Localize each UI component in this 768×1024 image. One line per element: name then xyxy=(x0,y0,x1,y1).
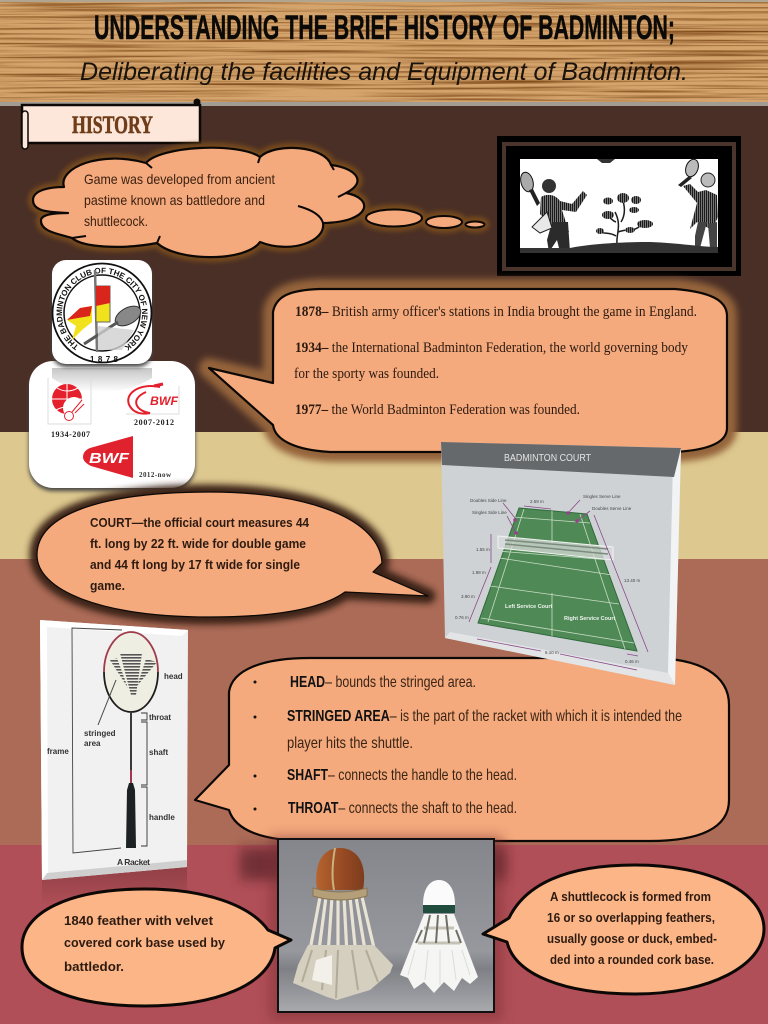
diagram: racket parts: area xyxy=(84,739,101,748)
diagram: racket parts: stringed xyxy=(84,729,116,738)
court labels: Left Service Court xyxy=(505,604,553,610)
court labels: Doubles Side Line xyxy=(470,498,507,503)
text: court dimensions: ft. long by 22 ft. wide for double game xyxy=(90,537,306,551)
text: modern shuttlecock xyxy=(547,890,717,967)
diagram: racket parts: handle xyxy=(149,813,175,822)
photo: old and modern shuttlecocks xyxy=(270,836,502,1020)
speech bubble: 1840 feather shuttlecock xyxy=(22,889,291,1006)
icon: small tree xyxy=(596,193,653,243)
text: timeline: 1934– the International Badminton Federation, the world governing body xyxy=(295,340,688,356)
diagram: racket parts: frame xyxy=(47,747,69,756)
speech bubble: court dimensions xyxy=(37,492,428,617)
court labels: 6.10 m xyxy=(545,650,559,655)
text: 1840 feather shuttlecock: covered cork base used by xyxy=(64,936,225,950)
text: ancient pastime: pastime known as battledore and xyxy=(84,192,265,208)
court labels: Doubles Serve Line xyxy=(592,506,632,511)
diagram: racket parts: shaft xyxy=(149,748,168,757)
icon: Badminton Club of the City of New York logo: THE BADMINTON CLUB OF THE CITY OF NEW YORK xyxy=(56,268,148,351)
diagram: badminton court xyxy=(441,442,681,685)
court labels: Singles Side Line xyxy=(472,510,507,515)
racket shaft and handle xyxy=(130,712,132,782)
text: 1840 feather shuttlecock xyxy=(64,914,225,974)
text: 1840 feather shuttlecock: 1840 feather with velvet xyxy=(64,914,214,928)
icon: BWF logo 2007-2012: 2007-2012 xyxy=(134,418,174,427)
panel reflection under racket diagram xyxy=(42,867,187,905)
text: racket parts: STRINGED AREA– is the part of the racket with which it is intended the xyxy=(287,708,682,725)
text: court dimensions: COURT—the official court measures 44 xyxy=(90,516,309,530)
text: timeline xyxy=(294,304,697,418)
framed picture: battledore players xyxy=(497,136,741,276)
icon: IBF globe logo 1934-2007 xyxy=(48,378,91,439)
heading: subtitle: Deliberating the facilities and Equipment of Badminton. xyxy=(80,58,688,86)
diagram: badminton court: BADMINTON COURT xyxy=(504,453,591,464)
text: timeline: for the sporty was founded. xyxy=(294,366,439,382)
text: timeline: 1977– the World Badminton Federation was founded. xyxy=(295,402,580,418)
photo shadow xyxy=(240,848,506,880)
net xyxy=(498,536,613,560)
court labels: 0.76 m xyxy=(455,615,469,620)
speech bubble: timeline xyxy=(209,289,727,452)
heading: history scroll label: HISTORY xyxy=(72,112,153,139)
text: modern shuttlecock: ded into a rounded cork base. xyxy=(550,953,714,967)
court labels: Singles Serve Line xyxy=(583,494,621,499)
icon: modern shuttlecock xyxy=(400,880,478,993)
court labels: 0.46 m xyxy=(625,659,639,664)
text: ancient pastime: shuttlecock. xyxy=(84,213,148,229)
court labels: 2.59 m xyxy=(530,499,544,504)
text: court dimensions xyxy=(90,516,309,593)
text: racket parts: SHAFT– connects the handle to the head. xyxy=(287,767,517,784)
text: modern shuttlecock: usually goose or duck, embed- xyxy=(547,932,717,946)
icon: BWF logo 2007-2012 xyxy=(126,384,179,427)
speech bubble: racket parts xyxy=(195,658,729,841)
diagram: racket parts xyxy=(40,620,188,880)
text: racket parts xyxy=(254,674,682,817)
speech bubble: modern shuttlecock xyxy=(483,865,764,994)
text: court dimensions: and 44 ft long by 17 ft wide for single xyxy=(90,558,300,572)
icon: shuttlecock in flight xyxy=(597,159,615,163)
text: racket parts: THROAT– connects the shaft to the head. xyxy=(288,800,517,817)
thought bubble: ancient pastime xyxy=(33,148,484,257)
icon: 1840 shuttlecock xyxy=(293,848,393,1000)
court labels: Right Service Court xyxy=(564,616,616,622)
icon: IBF globe logo 1934-2007: 1934-2007 xyxy=(51,430,90,439)
icon: BWF logo 2007-2012: BWF xyxy=(150,396,179,408)
text: modern shuttlecock: A shuttlecock is formed from xyxy=(550,890,711,904)
diagram: racket parts: A Racket xyxy=(117,857,150,867)
court labels xyxy=(455,494,641,664)
text: modern shuttlecock: 16 or so overlapping feathers, xyxy=(547,911,715,925)
court labels: 1.55 m xyxy=(476,547,490,552)
text: ancient pastime xyxy=(84,171,275,229)
court labels: 1.98 m xyxy=(472,570,486,575)
title banner xyxy=(0,0,768,106)
diagram: racket parts: throat xyxy=(149,713,171,722)
icon: BWF pennant logo 2012-now xyxy=(83,436,172,479)
icon: right player with racket xyxy=(678,157,718,250)
heading: history scroll label xyxy=(22,98,200,149)
icon: Badminton Club of the City of New York logo: 1878 xyxy=(90,355,119,364)
text: ancient pastime: Game was developed from ancient xyxy=(84,171,275,187)
text: racket parts: player hits the shuttle. xyxy=(287,735,413,752)
text: racket parts: HEAD– bounds the stringed area. xyxy=(290,674,476,691)
text: timeline: 1878– British army officer's stations in India brought the game in England. xyxy=(295,304,697,320)
court labels: 13.40 m xyxy=(624,578,641,583)
text: 1840 feather shuttlecock: battledor. xyxy=(64,960,124,974)
icon: BWF pennant logo 2012-now: 2012-now xyxy=(139,471,172,479)
icon: BWF pennant logo 2012-now: BWF xyxy=(89,450,130,467)
court labels: 3.90 m xyxy=(461,594,475,599)
diagram: racket parts: head xyxy=(164,672,183,681)
racket head xyxy=(104,632,158,712)
text: court dimensions: game. xyxy=(90,579,125,593)
icon: left player with racket xyxy=(519,171,587,252)
panel: BWF logos xyxy=(29,361,195,488)
